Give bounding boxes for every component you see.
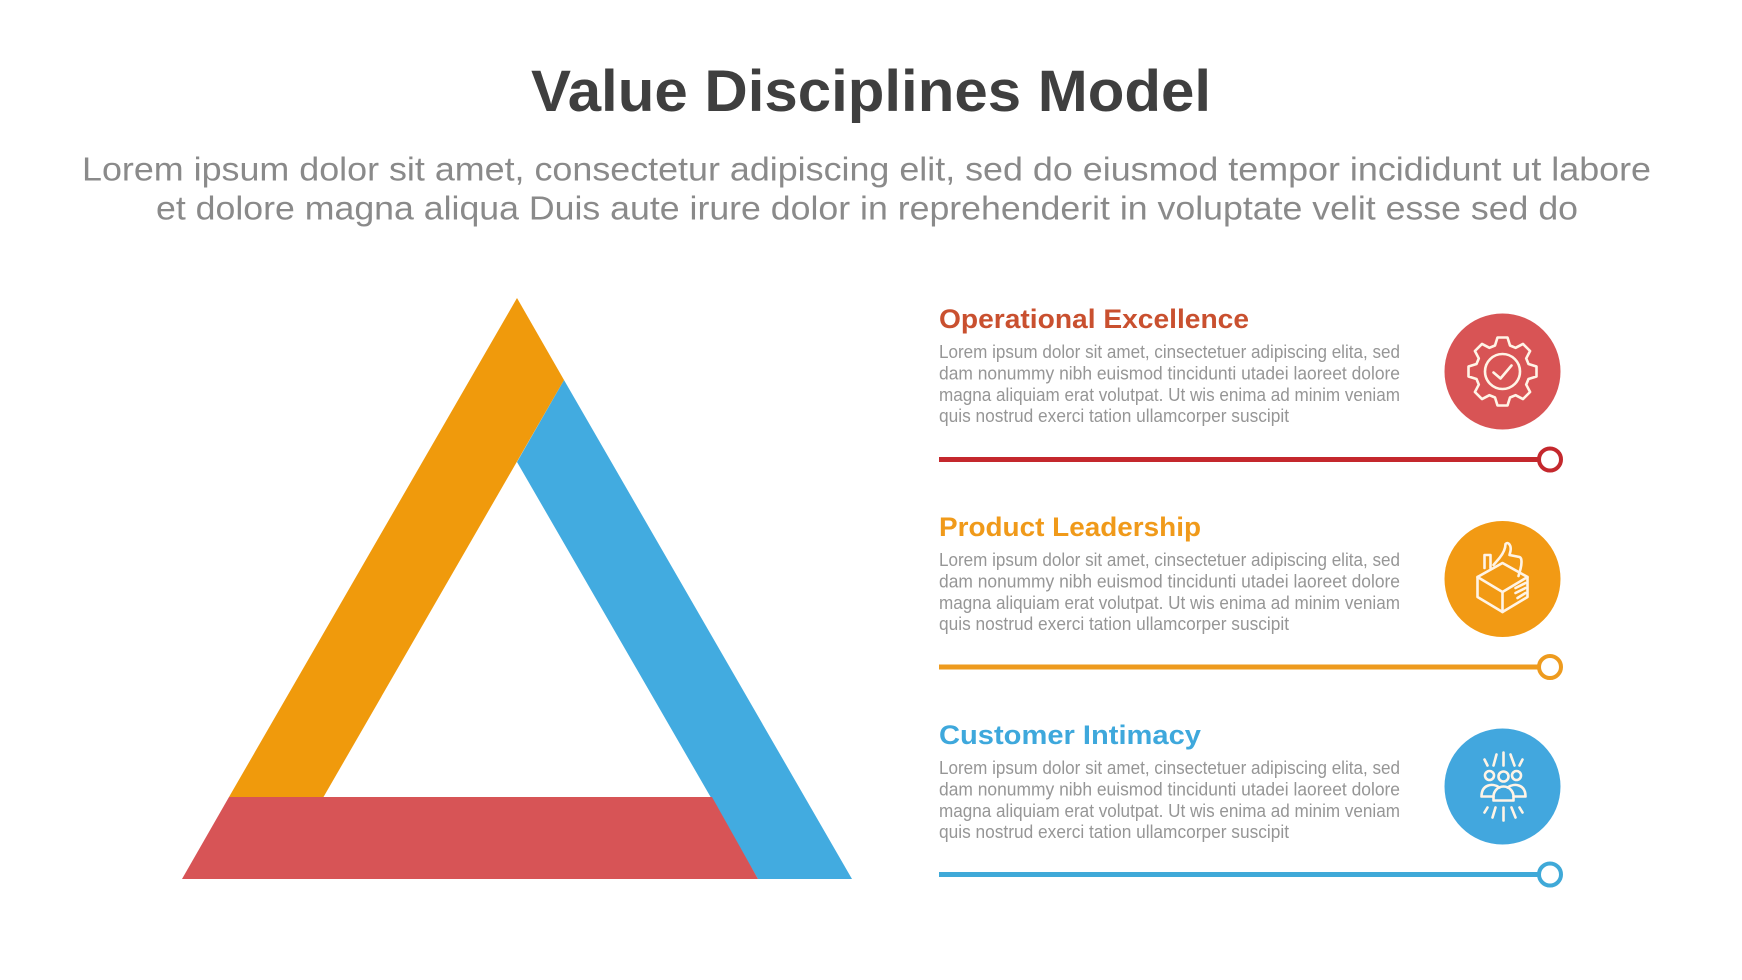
heading: Operational Excellence xyxy=(939,304,1249,334)
description: dam nonummy nibh euismod tincidunti utadei laoreet dolore xyxy=(939,572,1400,592)
triangle side: orange xyxy=(229,298,564,797)
heading: Product Leadership xyxy=(939,512,1201,542)
panel: operational excellence xyxy=(939,304,1561,470)
description: dam nonummy nibh euismod tincidunti utadei laoreet dolore xyxy=(939,364,1400,384)
subtitle xyxy=(82,150,1651,226)
description: magna aliquiam erat volutpat. Ut wis enima ad minim veniam xyxy=(939,801,1400,821)
triangle side: blue xyxy=(517,380,852,879)
timeline line with end marker xyxy=(939,864,1561,886)
description: Lorem ipsum dolor sit amet, cinsectetuer adipiscing elita, sed xyxy=(939,758,1400,778)
description: quis nostrud exerci tation ullamcorper suscipit xyxy=(939,822,1289,842)
description: magna aliquiam erat volutpat. Ut wis enima ad minim veniam xyxy=(939,593,1400,613)
subtitle: Lorem ipsum dolor sit amet, consectetur adipiscing elit, sed do eiusmod tempor incididunt ut labore xyxy=(82,150,1651,188)
description: dam nonummy nibh euismod tincidunti utadei laoreet dolore xyxy=(939,780,1400,800)
timeline line with end marker xyxy=(939,656,1561,678)
description: Lorem ipsum dolor sit amet, cinsectetuer adipiscing elita, sed xyxy=(939,550,1400,570)
triangle side: red xyxy=(182,797,758,879)
icon: gear with check xyxy=(1444,314,1560,430)
icon: group of people xyxy=(1444,728,1560,844)
panel: customer intimacy xyxy=(939,720,1561,886)
icon: box with thumbs up xyxy=(1444,521,1560,637)
description: quis nostrud exerci tation ullamcorper suscipit xyxy=(939,406,1289,426)
description: Lorem ipsum dolor sit amet, cinsectetuer adipiscing elita, sed xyxy=(939,342,1400,362)
description xyxy=(939,550,1400,634)
description: magna aliquiam erat volutpat. Ut wis enima ad minim veniam xyxy=(939,385,1400,405)
title: Value Disciplines Model xyxy=(531,59,1211,124)
triangle diagram xyxy=(182,298,852,879)
subtitle: et dolore magna aliqua Duis aute irure dolor in reprehenderit in voluptate velit esse sed do xyxy=(156,190,1578,226)
description xyxy=(939,342,1400,426)
description xyxy=(939,758,1400,842)
panel: product leadership xyxy=(939,512,1561,678)
heading: Customer Intimacy xyxy=(939,720,1201,750)
timeline line with end marker xyxy=(939,448,1561,470)
description: quis nostrud exerci tation ullamcorper suscipit xyxy=(939,614,1289,634)
